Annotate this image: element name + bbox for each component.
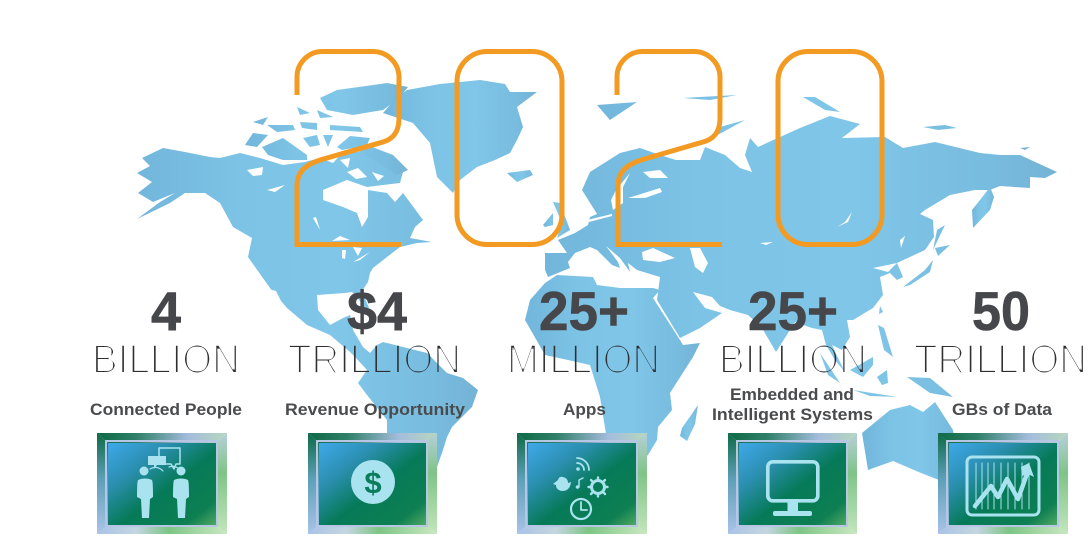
- Africa: [525, 275, 700, 480]
- label: Embedded and: [730, 385, 854, 404]
- number: $4: [347, 280, 407, 342]
- label second line: Intelligent Systems: [712, 405, 873, 424]
- unit: BILLION: [719, 336, 867, 382]
- panel: connected people: [90, 280, 242, 534]
- icon tile: dollar coin: $: [364, 465, 382, 500]
- second digit 2: [617, 52, 722, 244]
- North and South America: [137, 148, 478, 480]
- number: 25+: [748, 280, 838, 342]
- Madagascar: [680, 405, 698, 441]
- panel: apps: [507, 280, 660, 534]
- first digit 2: [297, 52, 401, 244]
- Islands of the Arctic and Pacific: [597, 95, 1030, 397]
- Great Britain and Ireland: [543, 202, 570, 238]
- second digit 0: [778, 52, 882, 244]
- icon tile: monitor: [728, 433, 857, 534]
- number: 25+: [539, 280, 629, 342]
- panel: gbs of data: [914, 280, 1087, 534]
- number: 4: [151, 280, 181, 342]
- label: GBs of Data: [952, 400, 1053, 419]
- first digit 0: [457, 52, 562, 244]
- unit: BILLION: [92, 336, 240, 382]
- Kamchatka: [972, 187, 994, 228]
- icon tile: people talking: [97, 433, 227, 534]
- Arctic Canada islands: [245, 83, 408, 175]
- icon tile: dollar coin: [308, 433, 437, 534]
- unit: TRILLION: [288, 336, 461, 382]
- label: Connected People: [90, 400, 242, 419]
- Iceland: [507, 170, 533, 182]
- Greenland: [383, 80, 537, 193]
- panel: revenue opportunity: [285, 280, 466, 534]
- label: Revenue Opportunity: [285, 400, 466, 419]
- lakes and inland seas: [247, 158, 905, 312]
- label: Apps: [563, 400, 606, 419]
- Australia: [862, 402, 960, 480]
- world map: [137, 80, 1057, 480]
- unit: MILLION: [507, 336, 660, 382]
- panel: embedded and intelligent systems: [712, 280, 873, 534]
- title: 2020 outlined numerals: [297, 52, 882, 244]
- Eurasia: [545, 116, 1057, 372]
- number: 50: [972, 280, 1030, 342]
- icon tile: app symbols: [517, 433, 647, 534]
- icon tile: rising chart: [938, 433, 1068, 534]
